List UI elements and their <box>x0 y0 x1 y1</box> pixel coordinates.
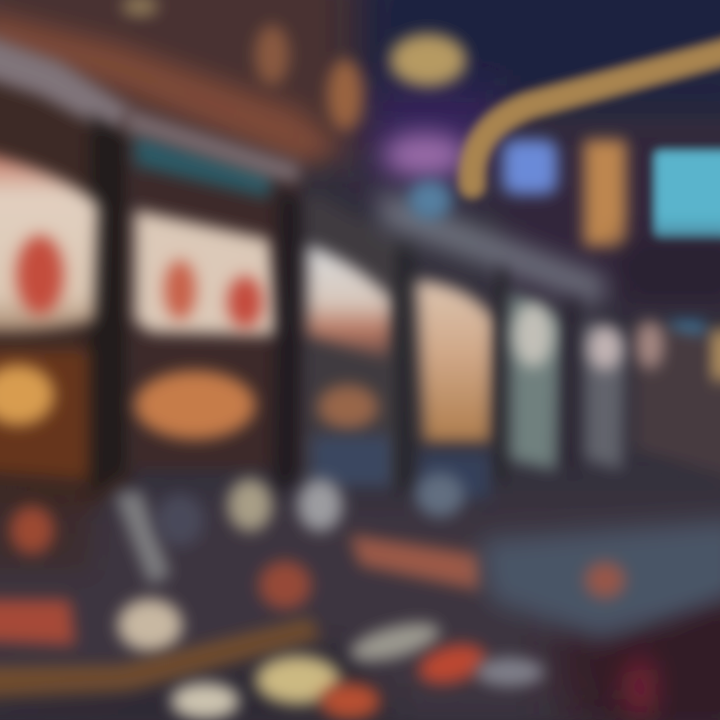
bottom ledge and round buttons <box>0 600 720 720</box>
machine 2 <box>125 108 308 495</box>
ceiling lights and beams <box>0 0 467 177</box>
machines 5 to 7 <box>510 240 720 480</box>
machine 1 <box>0 30 132 570</box>
machine 3 <box>305 190 414 490</box>
neon arch and background screens <box>472 48 720 376</box>
console: buttons and lower deck <box>0 473 720 651</box>
machine 4 <box>380 180 610 498</box>
